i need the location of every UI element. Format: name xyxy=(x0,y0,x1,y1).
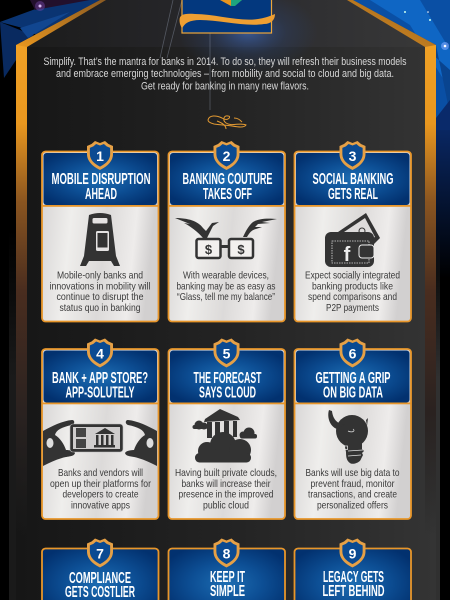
body 1: continue to disrupt the xyxy=(56,292,144,303)
body 4: open up their platforms for xyxy=(50,479,151,490)
body 3: Expect socially integrated xyxy=(305,270,400,282)
panel: card 9 xyxy=(294,538,411,600)
body 4 xyxy=(50,468,151,512)
body 4: innovative apps xyxy=(71,500,130,512)
heading 6: ON BIG DATA xyxy=(323,384,383,402)
badge 6: 6 xyxy=(349,346,357,362)
panel: card 5 xyxy=(168,338,285,519)
badge 4 xyxy=(87,338,113,368)
icon: winged dollar glasses xyxy=(175,218,277,258)
body 2: With wearable devices, xyxy=(183,270,269,282)
icon: wallet with facebook xyxy=(325,213,380,267)
intro text: Get ready for banking in many new flavors. xyxy=(141,80,309,92)
badge 4: 4 xyxy=(96,346,104,362)
icon: hands holding phone with bank app xyxy=(43,420,157,466)
badge 1: 1 xyxy=(96,148,104,164)
panel: card 8 xyxy=(168,538,285,600)
heading 3: GETS REAL xyxy=(328,186,378,203)
body 5: Having built private clouds, xyxy=(175,468,277,479)
panel: card 6 xyxy=(294,338,411,519)
heading 8 xyxy=(210,569,245,600)
ornament xyxy=(208,116,246,129)
icon: wet floor sign with phone xyxy=(80,213,120,266)
heading 4: BANK + APP STORE? xyxy=(52,370,148,387)
heading 2: TAKES OFF xyxy=(203,186,252,203)
heading 9 xyxy=(322,569,384,600)
body 6: personalized offers xyxy=(317,500,388,512)
heading 1: MOBILE DISRUPTION xyxy=(52,171,150,188)
heading 8: KEEP IT xyxy=(210,569,245,586)
body 1 xyxy=(50,270,150,314)
body 6: Banks will use big data to xyxy=(306,468,400,479)
heading 4 xyxy=(52,370,148,402)
badge 1 xyxy=(87,141,113,170)
badge 5 xyxy=(214,338,240,368)
body 4: Banks and vendors will xyxy=(58,468,143,479)
body 5 xyxy=(175,468,277,512)
heading 6: GETTING A GRIP xyxy=(316,370,390,387)
heading 3: SOCIAL BANKING xyxy=(312,171,394,188)
heading 2: BANKING COUTURE xyxy=(182,171,272,188)
body 2: “Glass, tell me my balance” xyxy=(177,292,275,303)
body 3: banking products like xyxy=(312,282,393,292)
badge 3: 3 xyxy=(349,148,357,164)
body 3 xyxy=(305,270,400,314)
panel: card 2 xyxy=(168,141,285,322)
intro text xyxy=(44,56,407,92)
panel: card 4 xyxy=(42,338,158,519)
badge 5: 5 xyxy=(223,346,231,362)
body 1: status quo in banking xyxy=(60,303,141,314)
body 1: innovations in mobility will xyxy=(50,282,150,292)
heading 9: LEFT BEHIND xyxy=(322,583,384,600)
body 5: banks will increase their xyxy=(182,479,271,490)
panel: card 1 xyxy=(42,141,158,322)
badge 7: 7 xyxy=(96,546,104,562)
heading 7 xyxy=(65,570,135,600)
heading 5: SAYS CLOUD xyxy=(199,384,256,402)
panel: card 3 xyxy=(294,141,411,322)
badge 2 xyxy=(214,141,240,170)
heading 6 xyxy=(316,370,390,402)
body 2: banking may be as easy as xyxy=(176,282,276,292)
panel: card 7 xyxy=(42,538,158,600)
badge 3 xyxy=(340,141,366,170)
badge 9: 9 xyxy=(349,546,357,562)
body 4: developers to create xyxy=(62,490,139,500)
body 6 xyxy=(306,468,400,512)
icon: winged dollar glasses: $ xyxy=(237,242,245,257)
icon: elephant light bulb xyxy=(328,410,368,464)
icon: bank on cloud xyxy=(192,409,257,462)
body 1: Mobile-only banks and xyxy=(57,270,143,282)
heading 2 xyxy=(182,171,272,203)
logo badge xyxy=(180,0,275,33)
body 5: public cloud xyxy=(203,500,249,512)
icon: wallet with facebook: f xyxy=(344,244,351,266)
heading 9: LEGACY GETS xyxy=(323,569,384,586)
body 2 xyxy=(176,270,276,303)
badge 8: 8 xyxy=(223,546,231,562)
heading 7: COMPLIANCE xyxy=(69,570,131,587)
heading 1: AHEAD xyxy=(85,186,117,203)
body 6: transactions, and create xyxy=(308,490,397,500)
heading 5 xyxy=(194,370,262,402)
icon: winged dollar glasses: $ xyxy=(205,242,213,257)
body 6: prevent fraud, monitor xyxy=(310,479,395,490)
body 3: spend comparisons and xyxy=(308,292,397,303)
badge 6 xyxy=(340,338,366,368)
heading 3 xyxy=(312,171,394,203)
heading 1 xyxy=(52,171,150,203)
heading 5: THE FORECAST xyxy=(194,370,262,387)
heading 8: SIMPLE xyxy=(210,583,245,600)
badge 2: 2 xyxy=(223,148,231,164)
body 3: P2P payments xyxy=(326,303,379,314)
heading 4: APP-SOLUTELY xyxy=(66,384,135,402)
body 5: presence in the improved xyxy=(178,490,274,500)
